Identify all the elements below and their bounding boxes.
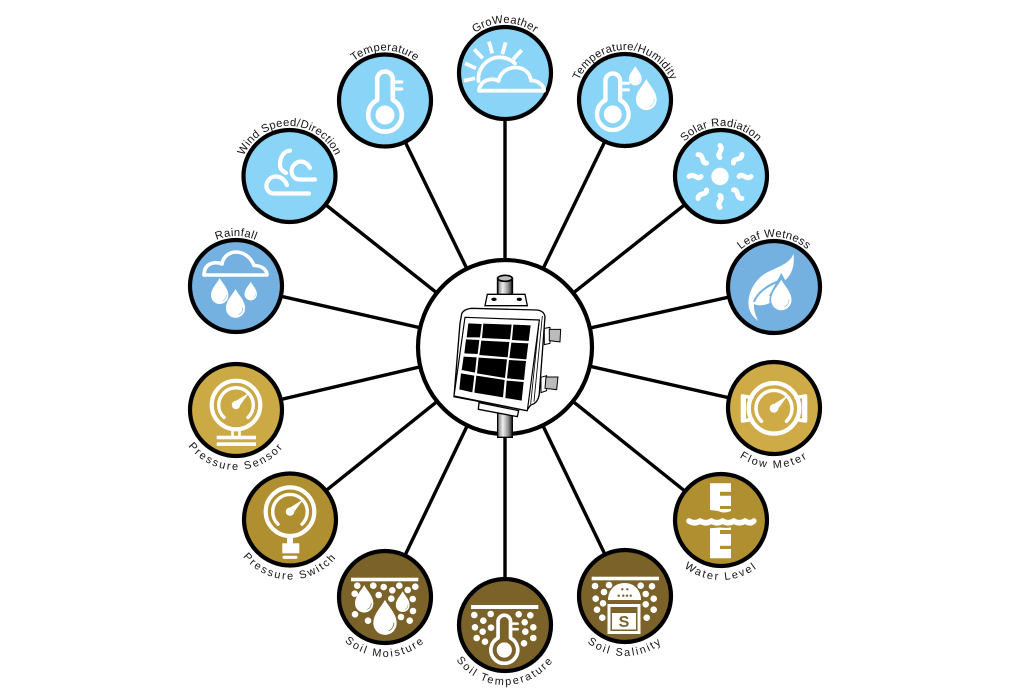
sensor: Pressure Switch: [242, 471, 338, 580]
icon: leaf with drop: [748, 254, 794, 321]
sensor: Soil Moisture: [336, 548, 434, 658]
sensor: GroWeather: [456, 15, 554, 122]
label: Leaf Wetness: [736, 229, 810, 249]
label: Water Level: [686, 561, 756, 580]
badge circle: [675, 474, 767, 566]
label: Wind Speed/Direction: [236, 118, 340, 155]
icon: radiant sun: [689, 146, 751, 208]
icon: water level staff: [689, 483, 754, 558]
badge circle: [459, 27, 551, 119]
label: Rainfall: [214, 228, 258, 240]
icon: drops in soil: [351, 578, 418, 635]
icon: rain cloud: [204, 252, 267, 318]
sensor: Soil Salinity: [576, 548, 674, 656]
label: Temperature: [350, 44, 418, 60]
sensor: Leaf Wetness: [726, 229, 822, 336]
hub: solar powered data logger: [418, 260, 592, 437]
icon: wind swirls: [266, 151, 315, 194]
icon: solar logger device: [454, 275, 561, 437]
badge circle: [190, 240, 282, 332]
badge circle: [728, 362, 820, 454]
icon: thermometer: [368, 72, 402, 132]
sensor: Solar Radiation: [672, 118, 770, 224]
label: Flow Meter: [740, 451, 806, 468]
badge circle: [339, 551, 431, 643]
label: Pressure Sensor: [188, 442, 282, 470]
badge circle: [675, 130, 767, 222]
badge circle: [459, 579, 551, 671]
icon: thermometer in soil: [471, 605, 538, 663]
sensor: Soil Temperature: [456, 576, 554, 688]
badge circle: [244, 130, 336, 222]
sensor: Pressure Sensor: [188, 362, 284, 470]
icon: pressure gauge on stand: [212, 381, 260, 446]
badge circle: [244, 474, 336, 566]
label: Soil Temperature: [457, 656, 552, 688]
icon: sun and cloud: [464, 42, 544, 91]
badge circle: [728, 241, 820, 333]
sensor: Rainfall: [188, 228, 284, 334]
label: Soil Salinity: [588, 638, 660, 656]
label: Pressure Switch: [243, 552, 336, 580]
hub circle: [418, 260, 592, 434]
label: Temperature/Humidity: [572, 43, 676, 78]
label: Soil Moisture: [346, 636, 423, 658]
badge circle: [339, 54, 431, 146]
icon: flow meter gauge with flanges: [741, 383, 807, 434]
sensor: Wind Speed/Direction: [236, 118, 340, 224]
icon: pressure switch gauge: [266, 487, 314, 559]
icon: thermometer and drops: [597, 66, 657, 130]
badge circle: [190, 364, 282, 456]
label: Solar Radiation: [680, 118, 760, 141]
badge circle: [579, 54, 671, 146]
icon: salt shaker in soil: S: [619, 614, 630, 631]
sensor: Temperature: [336, 44, 434, 149]
sensor: Temperature/Humidity: [572, 43, 676, 148]
label: GroWeather: [472, 15, 538, 32]
badge circle: [579, 550, 671, 642]
sensor: Water Level: [672, 472, 770, 580]
sensor: Flow Meter: [726, 360, 822, 468]
connector lines: [236, 73, 774, 625]
